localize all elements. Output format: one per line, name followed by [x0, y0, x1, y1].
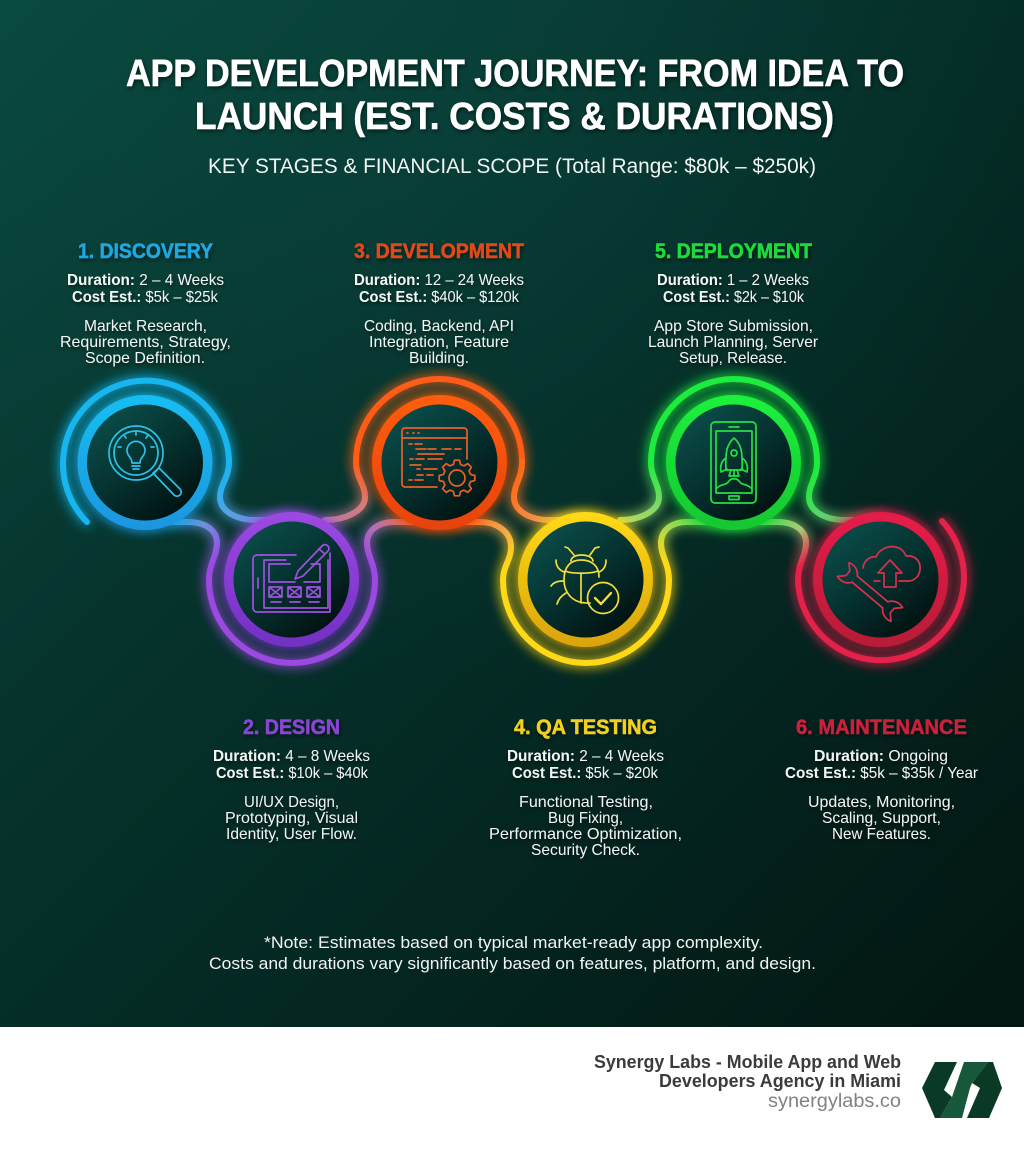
- stats and description: Cost Est.: $10k – $40k: [216, 765, 369, 782]
- stats and description: [354, 272, 524, 367]
- panel: 2 design text: [213, 716, 370, 843]
- panel: 5 deployment text: [648, 240, 819, 367]
- icon: tablet wireframe with pencil: [253, 545, 330, 612]
- stats and description: Performance Optimization,: [489, 826, 682, 843]
- stats and description: Security Check.: [531, 842, 640, 859]
- stats and description: Cost Est.: $5k – $20k: [512, 765, 659, 782]
- connecting neon paths: [63, 379, 964, 663]
- stats and description: Integration, Feature: [369, 334, 509, 351]
- panel: 4 QA testing text: [489, 716, 682, 859]
- stats and description: [648, 272, 819, 367]
- footer company text: Developers Agency in Miami: [659, 1071, 901, 1091]
- stats and description: Scope Definition.: [85, 350, 205, 367]
- heading: design: 2. DESIGN: [243, 716, 340, 739]
- panel: 6 maintenance text: [785, 716, 979, 843]
- stats and description: Setup, Release.: [679, 350, 787, 367]
- stats and description: New Features.: [832, 826, 931, 843]
- stats and description: [60, 272, 231, 367]
- heading: discovery: 1. DISCOVERY: [78, 240, 213, 263]
- stats and description: Market Research,: [84, 318, 207, 335]
- stats and description: Cost Est.: $2k – $10k: [663, 289, 805, 306]
- panel: 3 development text: [354, 240, 524, 367]
- heading: development: 3. DEVELOPMENT: [354, 240, 524, 263]
- footer company text: Synergy Labs - Mobile App and Web: [594, 1052, 901, 1072]
- stats and description: Duration: 4 – 8 Weeks: [213, 748, 370, 765]
- stats and description: Cost Est.: $5k – $35k / Year: [785, 765, 979, 782]
- title: [126, 53, 904, 138]
- stats and description: [489, 748, 682, 859]
- stats and description: Identity, User Flow.: [226, 826, 357, 843]
- node 6: maintenance ring and icon: [818, 517, 943, 642]
- footer band: [0, 1027, 1024, 1154]
- stats and description: Prototyping, Visual: [225, 810, 358, 827]
- icon: phone with rocket: [711, 422, 756, 503]
- footnote: Costs and durations vary significantly based on features, platform, and design.: [209, 954, 816, 973]
- stats and description: Duration: 12 – 24 Weeks: [354, 272, 524, 289]
- node 1: discovery ring and icon: [82, 400, 208, 525]
- stats and description: Launch Planning, Server: [648, 334, 819, 351]
- heading: maintenance: 6. MAINTENANCE: [796, 716, 967, 739]
- heading: QA testing: 4. QA TESTING: [514, 716, 657, 739]
- stats and description: Building.: [409, 350, 469, 367]
- stats and description: [213, 748, 370, 843]
- stats and description: Duration: 2 – 4 Weeks: [507, 748, 664, 765]
- heading: deployment: 5. DEPLOYMENT: [655, 240, 812, 263]
- panel: 1 discovery text: [60, 240, 231, 367]
- icon: synergy labs logo: [922, 1062, 1002, 1118]
- icon: bug with check mark: [551, 547, 618, 614]
- stats and description: UI/UX Design,: [244, 794, 339, 811]
- icon: cloud upload with wrench: [837, 547, 920, 622]
- icon: code window with gear: [402, 428, 475, 496]
- stats and description: Duration: Ongoing: [814, 748, 948, 765]
- stats and description: Updates, Monitoring,: [808, 794, 955, 811]
- stats and description: Cost Est.: $5k – $25k: [72, 289, 219, 306]
- node 2: design ring and icon: [229, 517, 354, 642]
- stats and description: Scaling, Support,: [822, 810, 941, 827]
- stats and description: Coding, Backend, API: [364, 318, 514, 335]
- stats and description: [785, 748, 979, 843]
- footnote: [209, 933, 816, 973]
- node 5: deployment ring and icon: [671, 400, 796, 525]
- stats and description: Duration: 2 – 4 Weeks: [67, 272, 224, 289]
- title: APP DEVELOPMENT JOURNEY: FROM IDEA TO: [126, 53, 904, 95]
- footer company text: synergylabs.co: [768, 1091, 901, 1112]
- stats and description: Duration: 1 – 2 Weeks: [657, 272, 809, 289]
- stats and description: Functional Testing,: [519, 794, 653, 811]
- footer company text: [594, 1052, 901, 1112]
- title: LAUNCH (EST. COSTS & DURATIONS): [195, 96, 834, 138]
- stats and description: Cost Est.: $40k – $120k: [359, 289, 520, 306]
- node 4: QA testing ring and icon: [523, 517, 648, 642]
- subtitle: KEY STAGES & FINANCIAL SCOPE (Total Range: $80k – $250k): [208, 154, 816, 178]
- stats and description: App Store Submission,: [654, 318, 813, 335]
- stats and description: Requirements, Strategy,: [60, 334, 231, 351]
- node 3: development ring and icon: [377, 400, 502, 525]
- icon: magnifier with light bulb: [109, 426, 181, 496]
- footnote: *Note: Estimates based on typical market-ready app complexity.: [264, 933, 763, 952]
- stats and description: Bug Fixing,: [548, 810, 623, 827]
